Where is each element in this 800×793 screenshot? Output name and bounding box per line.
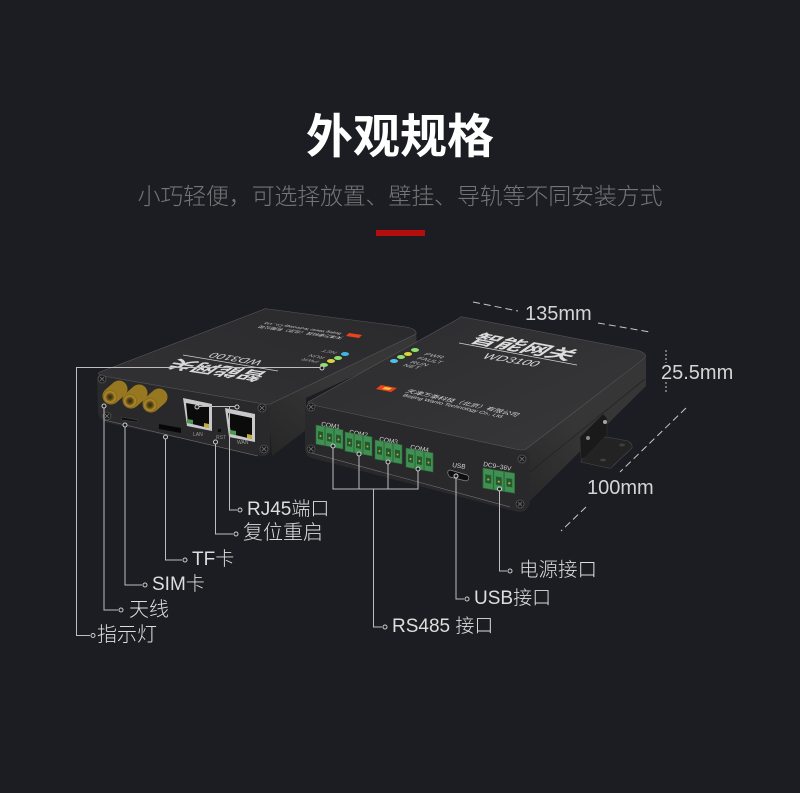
LAN port: LAN bbox=[193, 432, 203, 438]
title: 外观规格 bbox=[306, 110, 494, 163]
reset button: RST bbox=[216, 435, 226, 441]
callout: TF card: TF卡 bbox=[192, 548, 234, 570]
callout: RJ45 port bbox=[195, 405, 329, 520]
top face bbox=[308, 317, 646, 450]
screws bbox=[307, 403, 526, 508]
top face print bbox=[401, 331, 584, 419]
COM terminals bbox=[316, 425, 433, 472]
top face print bbox=[162, 322, 345, 383]
reset button bbox=[216, 429, 226, 441]
callout: indicator lights: 指示灯 bbox=[97, 623, 157, 646]
top face print: Beijing Wanto Technology Co., Ltd. bbox=[262, 322, 343, 335]
callout: SIM card: SIM卡 bbox=[152, 573, 205, 595]
terminal labels: COM4 bbox=[410, 444, 430, 454]
logo bbox=[376, 385, 397, 392]
callout: RS485 port: RS485 接口 bbox=[392, 615, 493, 637]
terminal labels: COM1 bbox=[321, 421, 341, 431]
callout: power port: 电源接口 bbox=[519, 559, 597, 581]
indicator lights: PWR bbox=[421, 352, 447, 360]
callout: reset: 复位重启 bbox=[243, 521, 323, 544]
callout: TF card bbox=[164, 435, 234, 570]
side face bbox=[520, 358, 646, 512]
callout: antenna: 天线 bbox=[129, 598, 169, 621]
dimension: height 25.5mm bbox=[661, 350, 733, 393]
terminal labels bbox=[321, 421, 512, 473]
screws bbox=[98, 375, 268, 453]
callout: power port bbox=[498, 487, 597, 581]
indicator lights: NET bbox=[400, 363, 424, 370]
USB port bbox=[448, 470, 469, 481]
indicator lights: RUN bbox=[407, 360, 432, 367]
antenna connectors bbox=[103, 389, 159, 412]
dimension: width 100mm: 100mm bbox=[587, 477, 654, 499]
model number: WD3100 bbox=[479, 352, 544, 368]
indicator lights: FAULT bbox=[414, 356, 446, 365]
device: right gateway, terminal side bbox=[305, 317, 646, 512]
callout: antenna bbox=[102, 404, 169, 621]
device: left gateway, antenna side bbox=[97, 309, 417, 456]
indicator lights bbox=[300, 349, 349, 367]
side face bbox=[268, 332, 417, 456]
top face bbox=[99, 309, 416, 404]
WAN port: WAN bbox=[237, 440, 249, 446]
SIM slot bbox=[121, 417, 138, 422]
terminal labels: COM2 bbox=[349, 429, 369, 439]
front panel bbox=[97, 374, 270, 456]
dimension: width 100mm bbox=[561, 408, 686, 531]
callout: USB port: USB接口 bbox=[474, 587, 551, 609]
terminal labels: USB bbox=[452, 462, 466, 471]
subtitle: 小巧轻便，可选择放置、壁挂、导轨等不同安装方式 bbox=[138, 183, 662, 209]
indicator lights: NET bbox=[320, 349, 340, 354]
indicator lights bbox=[390, 348, 447, 370]
callout: reset bbox=[214, 440, 323, 544]
LAN port bbox=[183, 398, 212, 438]
model number: WD3100 bbox=[205, 351, 266, 367]
dimension: height 25.5mm: 25.5mm bbox=[661, 362, 733, 384]
top face print: Beijing Wanto Technology Co., Ltd. bbox=[401, 393, 506, 419]
callout: SIM card bbox=[123, 423, 205, 595]
indicator lights: PWR bbox=[300, 357, 322, 363]
WAN port bbox=[225, 408, 255, 446]
callout: RJ45 port: RJ45端口 bbox=[247, 498, 329, 520]
company text: 天津万泰科技（北京）有限公司 bbox=[404, 388, 523, 418]
power terminal bbox=[483, 468, 515, 493]
callout: USB port bbox=[454, 474, 551, 609]
dimension: length 135mm bbox=[473, 302, 650, 332]
front panel bbox=[305, 404, 530, 512]
dimension: length 135mm: 135mm bbox=[525, 303, 592, 325]
logo bbox=[346, 333, 362, 338]
red accent bar bbox=[376, 230, 425, 236]
callout: indicator lights bbox=[76, 366, 324, 646]
product name: 智能网关 bbox=[162, 357, 273, 383]
terminal labels: DC9~36V bbox=[483, 461, 512, 473]
indicator lights: RUN bbox=[307, 353, 328, 359]
terminal labels: COM3 bbox=[379, 436, 399, 446]
product name: 智能网关 bbox=[464, 331, 584, 363]
company text: 天津万泰科技（北京）有限公司 bbox=[256, 324, 345, 340]
TF slot bbox=[159, 424, 181, 433]
callout: RS485 port bbox=[331, 444, 493, 637]
mounting bracket bbox=[580, 414, 632, 468]
